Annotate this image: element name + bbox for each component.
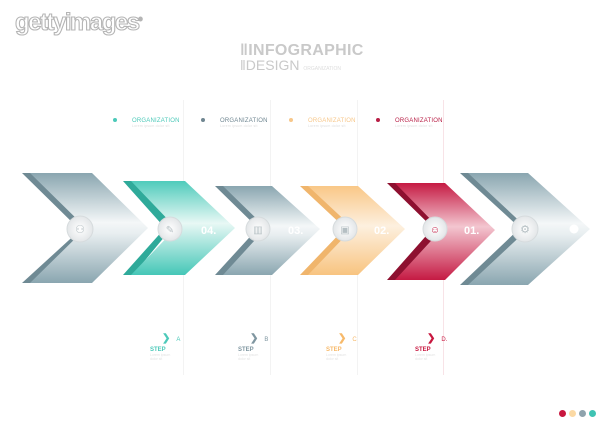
text: ORGANIZATION [132, 118, 180, 124]
text: STEP [238, 347, 254, 353]
color dots legend [559, 410, 596, 417]
chevron 2 [123, 181, 235, 275]
text: STEP [415, 347, 431, 353]
text: ❯ B [250, 333, 268, 344]
chevron 2: ✎ [166, 225, 174, 236]
text: Lorem ipsum dolor sit [220, 124, 258, 128]
text: STEP [326, 347, 342, 353]
text: dolor sit [415, 357, 427, 361]
text: ORGANIZATION [395, 118, 443, 124]
watermark logo: gettyimages® [15, 9, 141, 36]
title: ‖INFOGRAPHIC [240, 42, 364, 59]
chevron 3: 03. [288, 225, 303, 237]
text: ❯ C [338, 333, 357, 344]
organization labels [113, 118, 443, 128]
chevron 1 [22, 173, 148, 283]
chevron 6 [460, 173, 590, 285]
chevron 4 [300, 186, 405, 275]
chevron 4: ▣ [340, 225, 350, 236]
text: Lorem ipsum [415, 353, 435, 357]
chevron 5 [387, 183, 495, 280]
chevron 3 [215, 186, 320, 275]
text: Lorem ipsum [238, 353, 258, 357]
text: dolor sit [150, 357, 162, 361]
text: ❯ D. [427, 333, 447, 344]
text: Lorem ipsum dolor sit [132, 124, 170, 128]
text: dolor sit [238, 357, 250, 361]
text: Lorem ipsum [150, 353, 170, 357]
chevron 2: 04. [201, 225, 216, 237]
text: dolor sit [326, 357, 338, 361]
text: ORGANIZATION [308, 118, 356, 124]
steps [150, 333, 447, 361]
text: ORGANIZATION [220, 118, 268, 124]
text: Lorem ipsum [326, 353, 346, 357]
chevron 3: ▥ [253, 225, 263, 236]
chevron 1: ⚇ [75, 224, 85, 236]
chevron 4: 02. [374, 225, 389, 237]
title: ‖DESIGN ORGANIZATION [240, 57, 341, 73]
chevron 5: ☺ [430, 225, 440, 236]
text: ❯ A [162, 333, 180, 344]
text: Lorem ipsum dolor sit [395, 124, 433, 128]
chevron 5: 01. [464, 225, 479, 237]
title [240, 42, 364, 73]
chevron 6: ⚙ [520, 224, 530, 236]
text: Lorem ipsum dolor sit [308, 124, 346, 128]
text: STEP [150, 347, 166, 353]
